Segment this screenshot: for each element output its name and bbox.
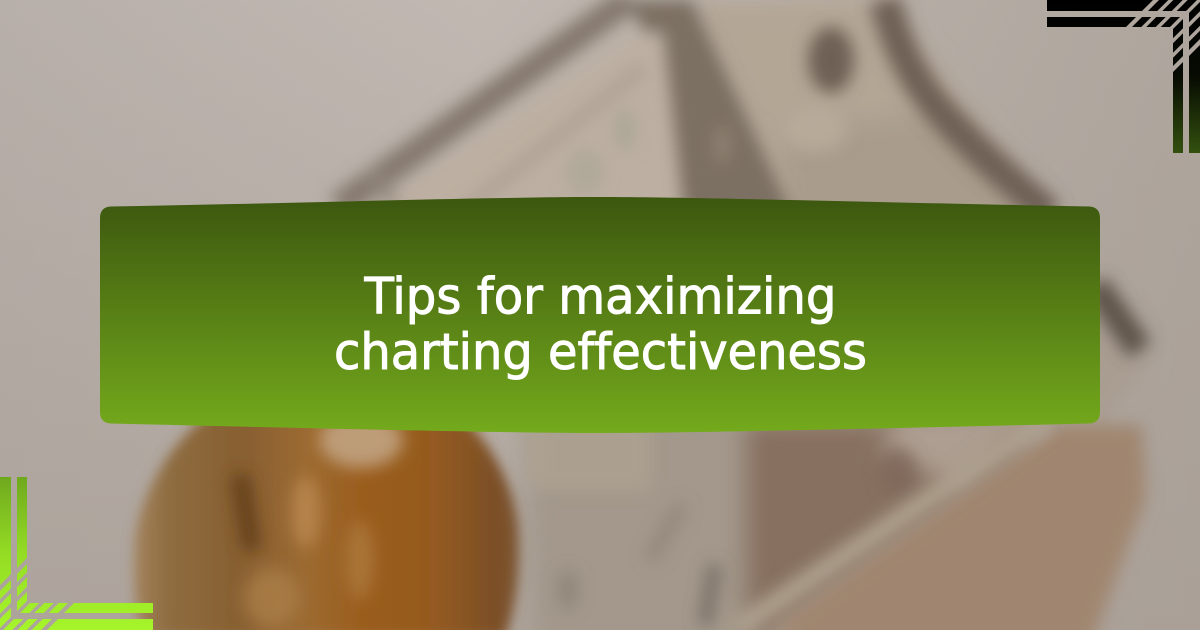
coin xyxy=(134,410,519,628)
title text: charting effectiveness xyxy=(334,323,867,381)
title text: Tips for maximizing xyxy=(364,268,836,326)
banner shape xyxy=(100,197,1100,433)
title banner xyxy=(100,197,1100,433)
corner decoration: top right stripes xyxy=(1047,0,1200,153)
title text xyxy=(334,268,867,381)
corner decoration: bottom left stripes xyxy=(0,477,153,630)
